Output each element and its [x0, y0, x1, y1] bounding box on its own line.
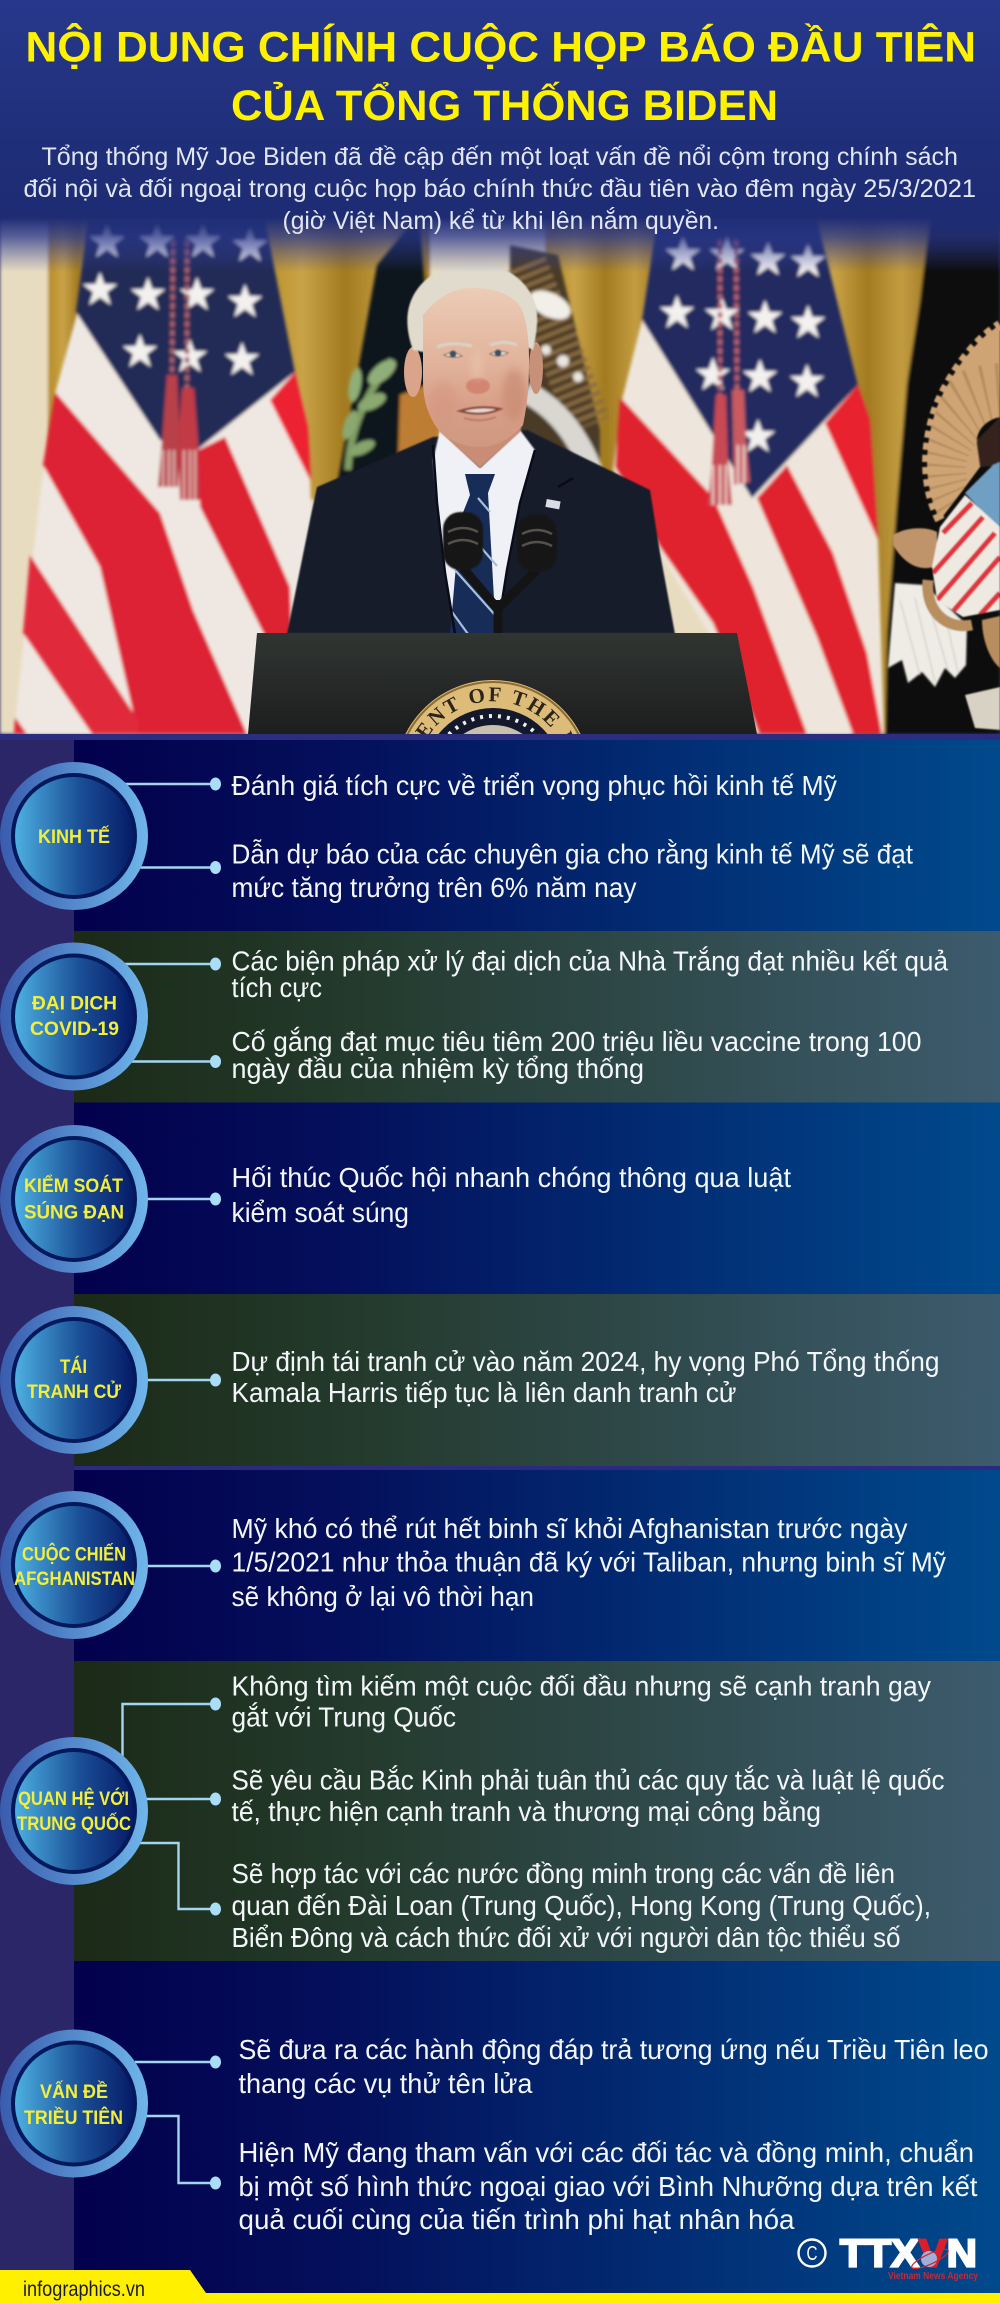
text block: 1/5/2021 như thỏa thuận đã ký với Taliban, nhưng binh sĩ Mỹ	[232, 1546, 946, 1578]
text block: Hiện Mỹ đang tham vấn với các đối tác và đồng minh, chuẩn	[238, 2137, 974, 2168]
text block: gắt với Trung Quốc	[232, 1702, 456, 1732]
text block: mức tăng trưởng trên 6% năm nay	[232, 872, 637, 903]
text block: Đánh giá tích cực về triển vọng phục hồi kinh tế Mỹ	[232, 770, 837, 801]
text block	[232, 1346, 940, 1408]
panel: Kinh tế	[0, 740, 1000, 931]
text block: bị một số hình thức ngoại giao với Bình Nhưỡng dựa trên kết	[238, 2171, 978, 2202]
left American flag	[14, 220, 330, 734]
wordmark: TTXVN	[840, 2232, 977, 2276]
lower feathers	[965, 687, 1000, 730]
badge: Tái tranh cử: TRANH CỬ	[27, 1381, 121, 1403]
badge: Quan hệ với Trung Quốc: QUAN HỆ VỚI	[18, 1788, 129, 1810]
text block	[232, 1670, 945, 1953]
flag pin	[545, 499, 561, 509]
rope under shield	[928, 580, 972, 626]
face	[423, 288, 529, 447]
agency name: Vietnam News Agency	[888, 2270, 978, 2282]
badge: Vấn đề Triều Tiên: VẤN ĐỀ	[40, 2081, 108, 2103]
text block: thang các vụ thử tên lửa	[238, 2068, 533, 2099]
badge: Kiểm soát súng đạn: SÚNG ĐẠN	[24, 1202, 124, 1224]
text block	[232, 1162, 791, 1228]
title	[26, 22, 976, 130]
hair	[407, 263, 537, 352]
text block	[238, 2034, 988, 2235]
lapels	[433, 445, 573, 634]
text block: Không tìm kiếm một cuộc đối đầu nhưng sẽ cạnh tranh gay	[232, 1670, 931, 1702]
badge: Cuộc chiến Afghanistan	[0, 1491, 148, 1639]
text block: tế, thực hiện cạnh tranh và thương mại công bằng	[232, 1796, 821, 1827]
connectors	[125, 958, 221, 1068]
badge: Cuộc chiến Afghanistan: CUỘC CHIẾN	[22, 1544, 126, 1566]
text block: Các biện pháp xử lý đại dịch của Nhà Trắng đạt nhiều kết quả	[232, 946, 949, 976]
footer: source label: infographics.vn	[23, 2278, 145, 2301]
badge: Kiểm soát súng đạn	[0, 1125, 148, 1273]
necktie	[450, 474, 497, 634]
seal flag behind the speaker	[510, 245, 600, 480]
connectors	[135, 2056, 221, 2190]
panel: Kiểm soát súng đạn	[0, 1102, 1000, 1294]
text block: kiểm soát súng	[232, 1197, 409, 1228]
text block: Dẫn dự báo của các chuyên gia cho rằng kinh tế Mỹ sẽ đạt	[232, 838, 913, 870]
footer: yellow bar	[0, 2270, 1000, 2304]
text block: Sẽ yêu cầu Bắc Kinh phải tuân thủ các quy tắc và luật lệ quốc	[232, 1764, 945, 1796]
text block	[232, 946, 949, 1084]
divider bar	[74, 1466, 1000, 1470]
intro text: (giờ Việt Nam) kể từ khi lên nắm quyền.	[282, 206, 719, 235]
panel: Cuộc chiến Afghanistan	[0, 1470, 1000, 1661]
badge: Vấn đề Triều Tiên	[0, 2030, 148, 2178]
panel: Quan hệ với Trung Quốc	[0, 1661, 1000, 1961]
connectors	[125, 778, 221, 874]
text block	[232, 770, 913, 903]
badge: Vấn đề Triều Tiên: TRIỀU TIÊN	[24, 2107, 123, 2129]
badge: Kiểm soát súng đạn: KIỂM SOÁT	[24, 1175, 123, 1197]
badge: Đại dịch COVID-19	[0, 942, 148, 1090]
text block: quan đến Đài Loan (Trung Quốc), Hong Kong (Trung Quốc),	[232, 1890, 931, 1921]
neck	[439, 426, 522, 468]
connector	[146, 1374, 221, 1386]
presidential eagle emblem at right	[888, 325, 1000, 730]
text block	[232, 1513, 946, 1612]
panel: header background	[0, 0, 1000, 272]
intro text: Tổng thống Mỹ Joe Biden đã đề cập đến một loạt vấn đề nổi cộm trong chính sách	[42, 143, 958, 171]
badge: Đại dịch COVID-19: COVID-19	[30, 1019, 119, 1040]
badge: Quan hệ với Trung Quốc: TRUNG QUỐC	[17, 1813, 131, 1835]
suit jacket	[287, 430, 675, 634]
head	[404, 263, 543, 447]
connector	[146, 1192, 221, 1206]
connectors	[122, 1698, 221, 1916]
podium seal	[406, 680, 580, 734]
intro text	[24, 143, 976, 235]
globe emblem	[910, 2246, 950, 2272]
center dark flag with olive branch	[338, 225, 440, 480]
text block: Hối thúc Quốc hội nhanh chóng thông qua luật	[232, 1162, 791, 1193]
shield	[932, 462, 1000, 617]
text block: Mỹ khó có thể rút hết binh sĩ khỏi Afghanistan trước ngày	[232, 1513, 908, 1544]
podium	[248, 633, 757, 734]
logo: TTXVN	[798, 2232, 978, 2282]
text block: ngày đầu của nhiệm kỳ tổng thống	[232, 1053, 644, 1084]
copyright mark	[798, 2240, 826, 2266]
text block: Sẽ hợp tác với các nước đồng minh trong các vấn đề liên	[232, 1858, 895, 1889]
copyright mark: C	[806, 2243, 818, 2265]
panel: Tái tranh cử	[0, 1294, 1000, 1466]
feather fan	[927, 325, 1000, 542]
mouth	[460, 407, 500, 420]
right American flag	[613, 220, 884, 734]
badge: Tái tranh cử	[0, 1306, 148, 1454]
intro text: đối nội và đối ngoại trong cuộc họp báo chính thức đầu tiên vào đêm ngày 25/3/2021	[24, 175, 976, 203]
small wing	[893, 528, 937, 568]
shirt collar	[433, 430, 535, 634]
text block: Sẽ đưa ra các hành động đáp trả tương ứng nếu Triều Tiên leo	[238, 2034, 988, 2065]
badge: Kinh tế: KINH TẾ	[38, 826, 110, 848]
badge: Kinh tế	[0, 762, 148, 910]
divider bar under photo	[0, 734, 1000, 740]
ears	[404, 347, 422, 397]
photo: Biden at press conference podium	[0, 221, 1000, 734]
white tail feathers	[888, 583, 967, 687]
connector	[146, 1560, 221, 1572]
facial shading	[436, 357, 527, 420]
badge: Đại dịch COVID-19: ĐẠI DỊCH	[32, 994, 117, 1014]
brows and eyes	[437, 342, 517, 357]
text block: Cố gắng đạt mục tiêu tiêm 200 triệu liều vaccine trong 100	[232, 1026, 922, 1057]
text block: sẽ không ở lại vô thời hạn	[232, 1581, 534, 1612]
title: NỘI DUNG CHÍNH CUỘC HỌP BÁO ĐẦU TIÊN	[26, 22, 976, 72]
microphones	[443, 512, 557, 634]
badge: Tái tranh cử: TÁI	[60, 1356, 87, 1378]
text block: Dự định tái tranh cử vào năm 2024, hy vọng Phó Tổng thống	[232, 1346, 940, 1377]
text block: Kamala Harris tiếp tục là liên danh tranh cử	[232, 1377, 736, 1408]
badge: Quan hệ với Trung Quốc	[0, 1737, 148, 1885]
badge: Cuộc chiến Afghanistan: AFGHANISTAN	[14, 1569, 135, 1590]
title: CỦA TỔNG THỐNG BIDEN	[231, 80, 778, 130]
text block: Biển Đông và cách thức đối xử với người dân tộc thiểu số	[232, 1922, 900, 1953]
panel: Đại dịch COVID-19	[0, 931, 1000, 1102]
wall and curtains backdrop	[0, 200, 1000, 734]
panel: Vấn đề Triều Tiên	[0, 1961, 1000, 2293]
text block: tích cực	[232, 972, 322, 1003]
text block: quả cuối cùng của tiến trình phi hạt nhân hóa	[238, 2204, 795, 2235]
